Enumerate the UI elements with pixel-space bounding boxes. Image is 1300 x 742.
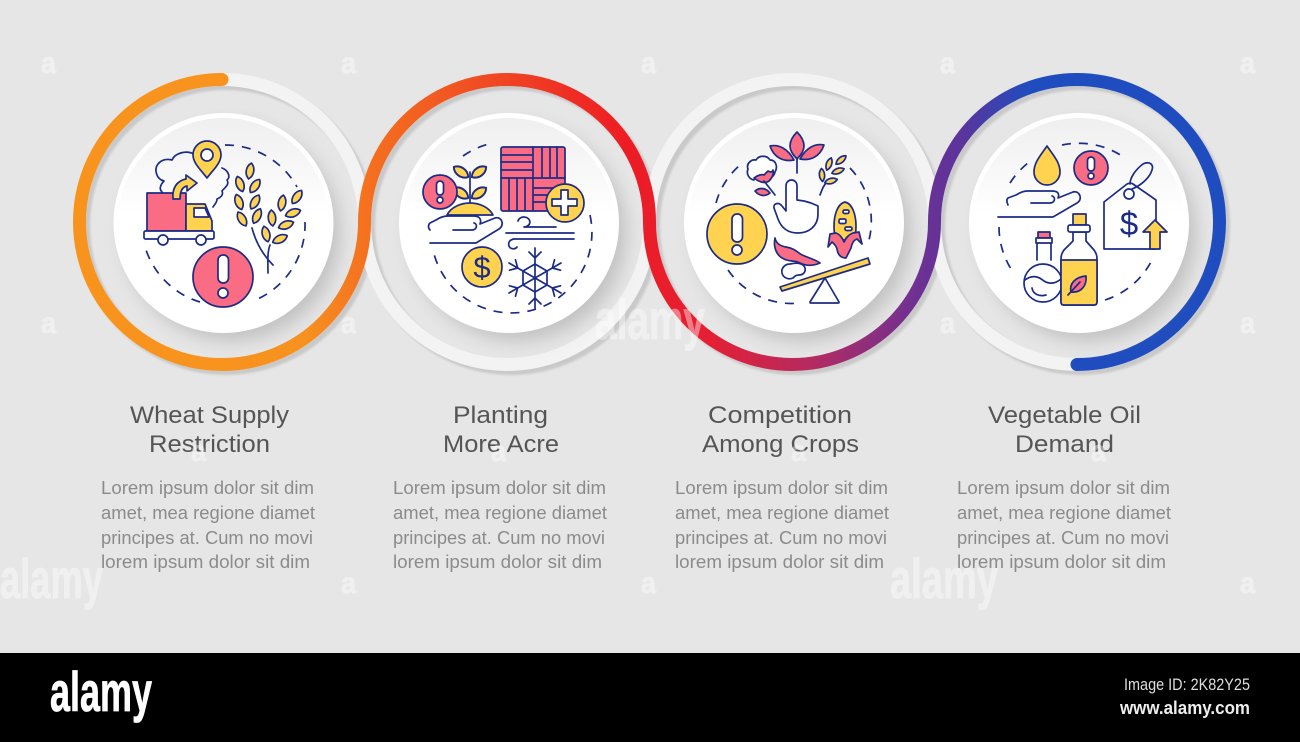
text block 2: lorem ipsum dolor sit dim (393, 552, 602, 572)
text block 2 (393, 478, 607, 572)
watermark overlay: alamy (890, 547, 998, 610)
text block 1: Lorem ipsum dolor sit dim (101, 478, 314, 498)
text block 4: Lorem ipsum dolor sit dim (957, 478, 1170, 498)
icon: competition among crops (707, 132, 871, 303)
text block 3: amet, mea regione diamet (675, 503, 889, 523)
heading: vegetable oil demand: Vegetable Oil (988, 402, 1141, 429)
panel: disc 3 (684, 113, 911, 341)
heading: planting more acre (443, 402, 559, 458)
panel: disc 1 (114, 113, 340, 341)
watermark overlay: a (491, 435, 506, 468)
heading: vegetable oil demand: Demand (1015, 431, 1114, 458)
heading: competition among crops (702, 402, 859, 458)
watermark overlay: a (1240, 307, 1255, 340)
watermark overlay: a (641, 47, 656, 80)
panel: disc 2 (399, 113, 626, 341)
text block 3: lorem ipsum dolor sit dim (675, 552, 884, 572)
text block 2: principes at. Cum no movi (393, 528, 605, 548)
watermark overlay: a (641, 567, 656, 600)
website: www.alamy.com (1119, 698, 1250, 718)
text block 3: Lorem ipsum dolor sit dim (675, 478, 888, 498)
watermark overlay: alamy (0, 547, 103, 610)
heading: wheat supply restriction (130, 402, 289, 458)
text block 1 (101, 478, 315, 572)
text block 1: amet, mea regione diamet (101, 503, 315, 523)
light ghost rings (80, 80, 1220, 364)
text block 4 (957, 478, 1171, 572)
watermark overlay: a (41, 307, 56, 340)
text block 3: principes at. Cum no movi (675, 528, 887, 548)
text block 4: amet, mea regione diamet (957, 503, 1171, 523)
panel: disc 4 (969, 113, 1196, 341)
heading: vegetable oil demand (988, 402, 1141, 458)
watermark overlay: a (791, 435, 806, 468)
watermark overlay: a (341, 567, 356, 600)
watermark overlay: a (41, 47, 56, 80)
text block 4: principes at. Cum no movi (957, 528, 1169, 548)
image id: Image ID: 2K82Y25 (1124, 675, 1250, 694)
watermark overlay: a (1240, 567, 1255, 600)
heading: competition among crops: Competition (708, 402, 852, 429)
icon: vegetable oil demand: $ (1120, 205, 1138, 242)
icon: planting more acre: $ (473, 250, 491, 285)
text block 2: amet, mea regione diamet (393, 503, 607, 523)
watermark overlay: a (341, 307, 356, 340)
alamy logo: alamy (50, 660, 152, 723)
watermark overlay (0, 47, 1255, 610)
text block 3 (675, 478, 889, 572)
heading: competition among crops: Among Crops (702, 431, 859, 458)
watermark overlay: a (341, 47, 356, 80)
watermark overlay: a (191, 435, 206, 468)
watermark overlay: alamy (595, 288, 705, 351)
footer bar (0, 653, 1300, 742)
text block 4: lorem ipsum dolor sit dim (957, 552, 1166, 572)
gradient snake line (80, 79, 1220, 364)
icon: wheat supply restriction (144, 141, 305, 307)
heading: wheat supply restriction: Wheat Supply (130, 402, 289, 429)
watermark overlay: a (940, 307, 955, 340)
watermark overlay: a (1240, 47, 1255, 80)
icon: planting more acre (423, 144, 592, 313)
watermark overlay: a (940, 47, 955, 80)
text block 1: lorem ipsum dolor sit dim (101, 552, 310, 572)
heading: planting more acre: More Acre (443, 431, 559, 458)
ring shadows (84, 84, 1224, 368)
icon: vegetable oil demand (998, 143, 1167, 305)
watermark overlay: a (1091, 435, 1106, 468)
heading: wheat supply restriction: Restriction (149, 431, 270, 458)
text block 1: principes at. Cum no movi (101, 528, 313, 548)
text block 2: Lorem ipsum dolor sit dim (393, 478, 606, 498)
heading: planting more acre: Planting (453, 402, 548, 429)
